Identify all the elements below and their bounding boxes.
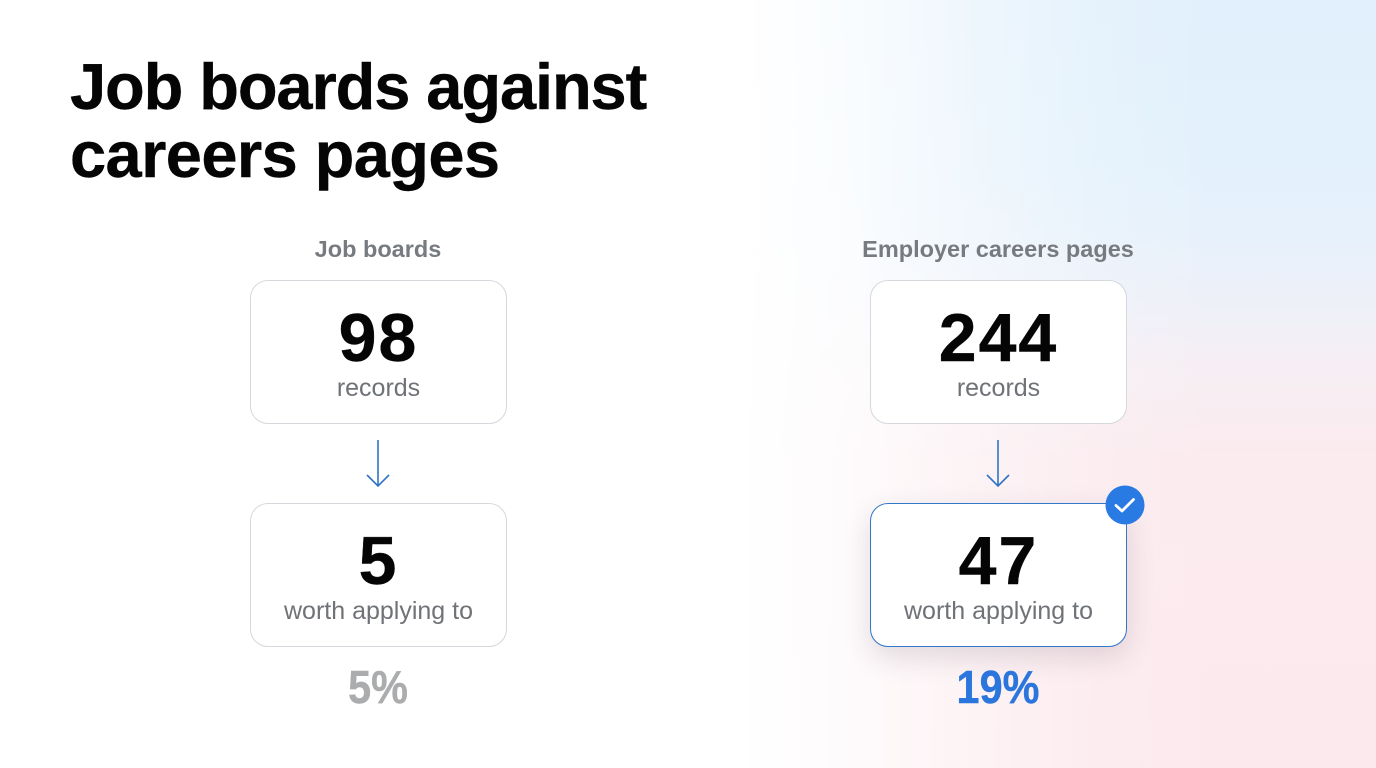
number: 47: 47 [959, 523, 1038, 599]
title [70, 50, 647, 192]
number: 5: 5 [359, 523, 398, 599]
arrow: job boards [366, 440, 390, 487]
card: 98 records [250, 280, 507, 424]
card: 5 worth applying to [250, 503, 507, 647]
label: records: records [957, 374, 1040, 402]
card: 47 worth applying to (highlighted) [870, 503, 1127, 647]
panel: employer careers pages [861, 236, 1144, 713]
panel: job boards [250, 236, 507, 713]
title: Job boards against [70, 50, 646, 123]
number: 98: 98 [339, 300, 418, 376]
number: 244: 244 [939, 300, 1058, 376]
heading: employer careers pages: Employer careers pages [862, 236, 1134, 262]
label: worth applying to: worth applying to [284, 597, 473, 625]
label: records: records [337, 374, 420, 402]
arrow: careers pages [986, 440, 1010, 487]
label: worth applying to: worth applying to [904, 597, 1093, 625]
card: 244 records [870, 280, 1127, 424]
percentage: 5%: 5% [348, 661, 408, 713]
heading: job boards: Job boards [315, 236, 441, 262]
title: careers pages [70, 118, 499, 190]
icon: check badge [1106, 486, 1144, 524]
percentage: 19%: 19% [957, 661, 1039, 713]
